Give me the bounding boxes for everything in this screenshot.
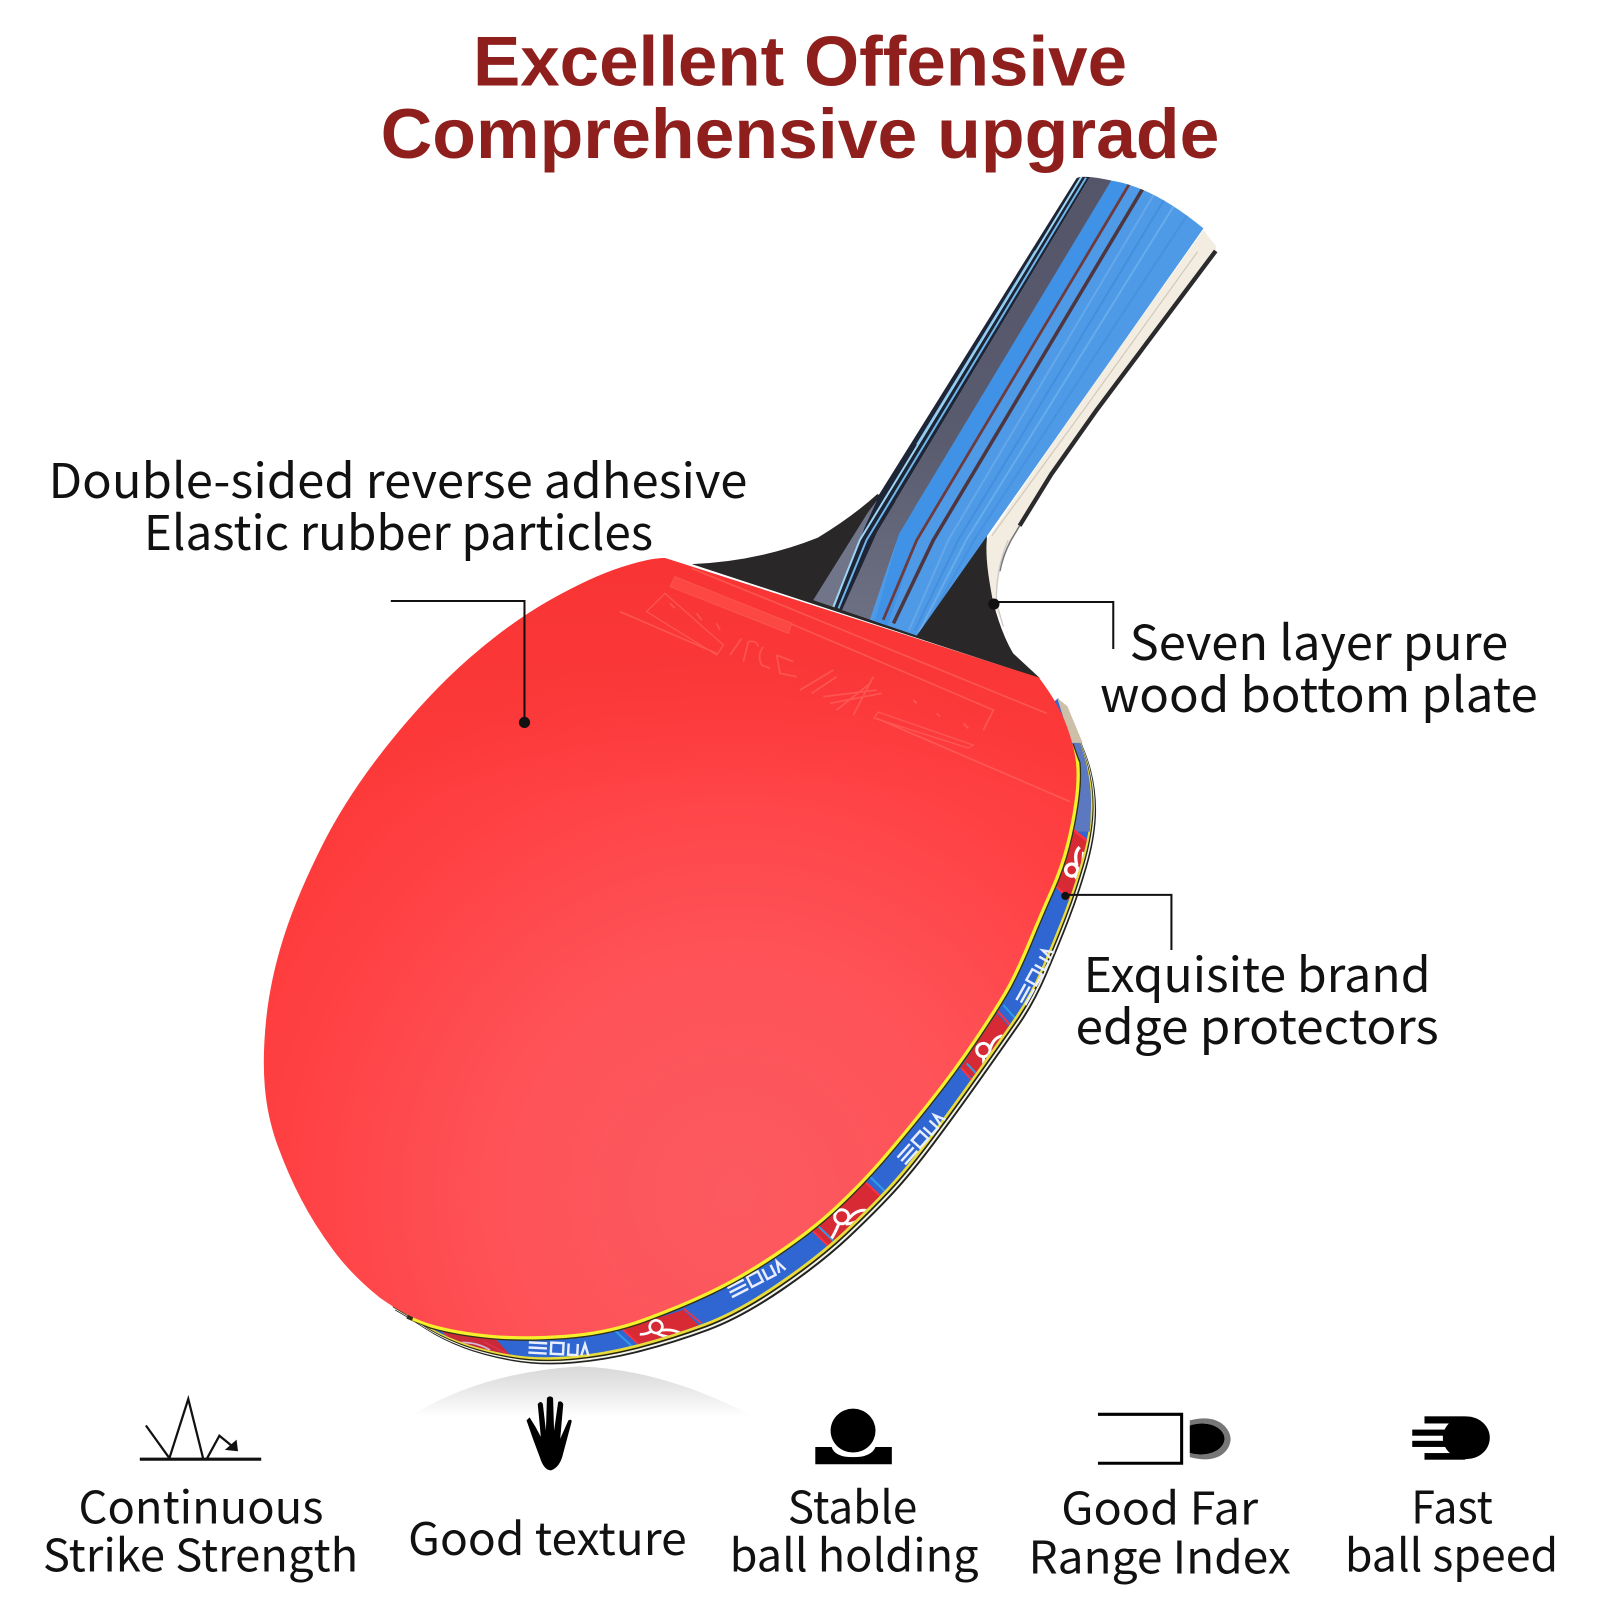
icon: speeding ball [1412, 1416, 1490, 1460]
band segment 2 and 3 [813, 1005, 1017, 1247]
embossed rubber markings [620, 568, 1070, 802]
feature: continuous strike strength: Strike Strength [43, 1519, 358, 1584]
feature: good far range index: Range Index [1029, 1521, 1291, 1586]
band segment 1 [1056, 829, 1087, 900]
callout: rubber particles [48, 442, 747, 728]
wood edge [986, 230, 1217, 627]
feature: fast ball speed [1345, 1416, 1558, 1584]
upper mottled band section [1063, 706, 1091, 832]
title [381, 22, 1219, 173]
feature: good far range index [1029, 1414, 1291, 1586]
title: Excellent Offensive [473, 22, 1127, 101]
red rubber face [264, 558, 1077, 1336]
icon: bouncing ball trajectory [140, 1399, 261, 1459]
brand marks on band [528, 947, 1054, 1356]
edge protector band [390, 698, 1102, 1364]
feature: good texture: Good texture [408, 1503, 687, 1568]
icon: hand [527, 1396, 572, 1470]
band segment 4 and 5 [440, 1308, 702, 1355]
feature: fast ball speed: Fast [1411, 1471, 1493, 1536]
paddle handle [692, 172, 1233, 678]
feature: good texture [408, 1396, 687, 1568]
callout: edge protectors: Exquisite brand [1084, 936, 1431, 1006]
callout: edge protectors: edge protectors [1076, 988, 1439, 1058]
icon: ball on cradle [815, 1409, 892, 1464]
feature: stable ball holding [730, 1409, 979, 1584]
paddle [264, 172, 1233, 1364]
feature: fast ball speed: ball speed [1345, 1519, 1558, 1584]
feature: good far range index: Good Far [1061, 1472, 1259, 1537]
title: Comprehensive upgrade [381, 94, 1219, 173]
callout: edge protectors [1061, 892, 1439, 1058]
yellow rim [408, 745, 1077, 1336]
callout: rubber particles: Double-sided reverse adhesive [48, 442, 747, 512]
callout: wood plate [988, 598, 1538, 726]
feature: continuous strike strength [43, 1399, 358, 1584]
feature: continuous strike strength: Continuous [79, 1471, 323, 1536]
callout: wood plate: Seven layer pure [1130, 604, 1508, 674]
shadow under paddle [410, 1366, 753, 1416]
feature: stable ball holding: ball holding [730, 1519, 979, 1584]
black neck [692, 494, 1040, 678]
icon: table and ball [1098, 1414, 1231, 1463]
feature: stable ball holding: Stable [788, 1471, 917, 1536]
callout: wood plate: wood bottom plate [1100, 656, 1538, 726]
callout: rubber particles: Elastic rubber particles [144, 494, 653, 564]
